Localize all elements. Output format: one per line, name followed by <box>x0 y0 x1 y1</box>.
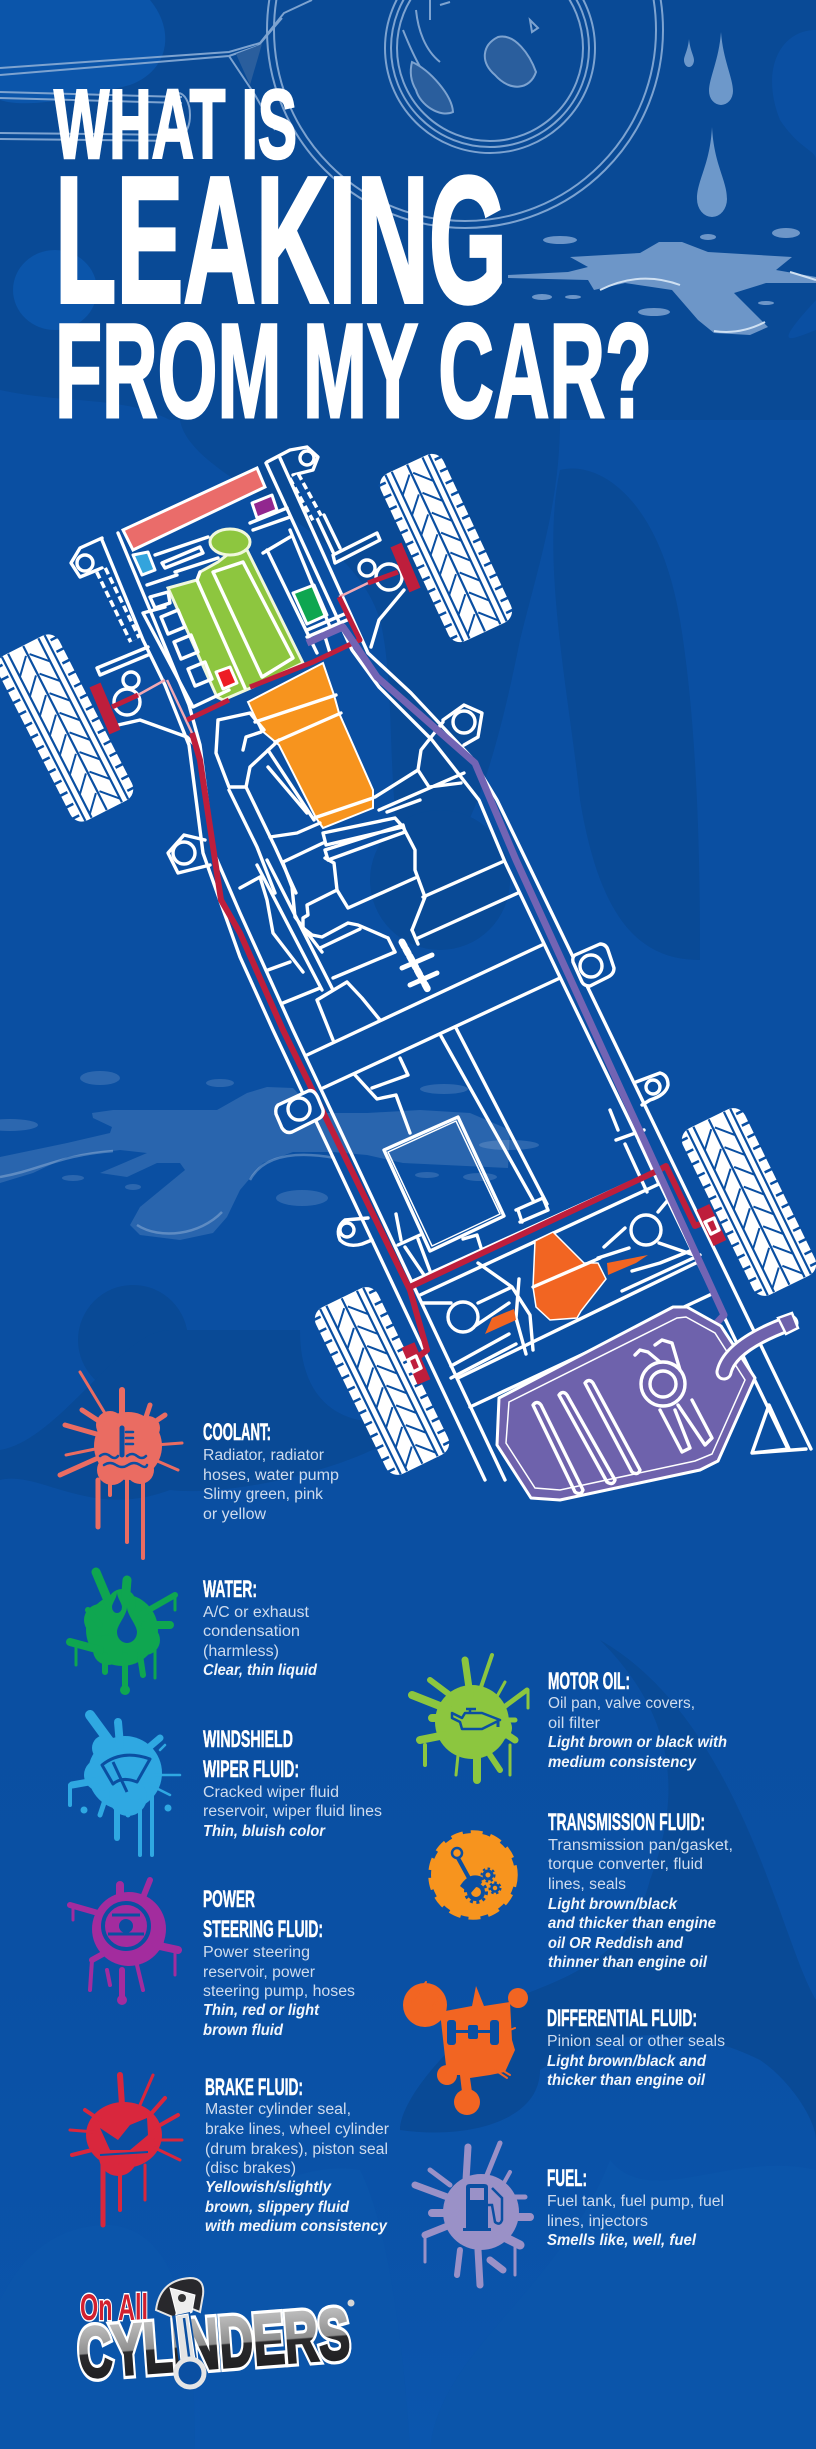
text: motor oil: Light brown or black with <box>548 1734 727 1751</box>
text: power steering: STEERING FLUID: <box>203 1916 323 1943</box>
splat icon: power steering <box>70 1880 178 2005</box>
text: coolant: or yellow <box>203 1506 267 1523</box>
legend: transmission fluid <box>430 1809 733 1971</box>
text: motor oil <box>548 1668 727 1771</box>
legend: motor oil <box>412 1655 727 1780</box>
text: power steering: POWER <box>203 1886 255 1913</box>
logo cylinders word: CYLINDERS <box>75 2294 352 2394</box>
water drops <box>684 32 733 217</box>
title <box>54 69 652 446</box>
legend: fuel <box>415 2143 724 2285</box>
text: transmission fluid: TRANSMISSION FLUID: <box>548 1809 705 1836</box>
text: fuel: FUEL: <box>547 2165 587 2192</box>
text: brake fluid: BRAKE FLUID: <box>205 2074 303 2101</box>
text: brake fluid: (disc brakes) <box>205 2160 296 2177</box>
legend: brake fluid <box>70 2074 389 2235</box>
tire: rear left <box>310 1283 454 1479</box>
text: brake fluid: with medium consistency <box>205 2218 388 2235</box>
component: power steering reservoir <box>252 495 277 518</box>
component: fuel tank <box>497 1307 798 1500</box>
text: wiper fluid: WIPER FLUID: <box>203 1756 299 1783</box>
logo: On All Cylinders <box>75 2278 355 2394</box>
text: wiper fluid: reservoir, wiper fluid lines <box>203 1803 382 1820</box>
logo cylinders word: CYLINDERS <box>75 2294 352 2394</box>
splat icon: transmission <box>430 1832 516 1918</box>
text: fuel: lines, injectors <box>547 2213 648 2230</box>
text: power steering: Thin, red or light <box>203 2002 320 2019</box>
fuel pump icon <box>463 2184 502 2231</box>
text: transmission fluid: oil OR Reddish and <box>548 1935 684 1952</box>
text: coolant: Radiator, radiator <box>203 1447 324 1464</box>
registered mark <box>348 2300 354 2306</box>
text: coolant: Slimy green, pink <box>203 1486 323 1503</box>
wheel hubs on rear brakes <box>408 1218 719 1372</box>
text: fuel: Fuel tank, fuel pump, fuel <box>547 2193 724 2210</box>
frame mounts <box>276 944 668 1245</box>
text: water: (harmless) <box>203 1643 279 1660</box>
text: wiper fluid: WINDSHIELD <box>203 1726 293 1753</box>
middle puddle <box>0 1071 539 1240</box>
text: coolant: hoses, water pump <box>203 1467 339 1484</box>
water drops icon <box>112 1592 137 1643</box>
title: WHAT IS <box>54 69 297 179</box>
text: water: condensation <box>203 1623 300 1640</box>
oil can icon <box>452 1709 500 1729</box>
axle icon <box>447 2020 499 2045</box>
text: differential fluid: thicker than engine oil <box>547 2072 706 2089</box>
text: wiper fluid: Thin, bluish color <box>203 1823 326 1840</box>
text: fuel <box>547 2165 724 2249</box>
legend: coolant <box>60 1372 339 1558</box>
text: coolant: COOLANT: <box>203 1419 271 1446</box>
splat icon: brake fluid <box>70 2075 182 2225</box>
splat icon: water <box>70 1572 175 1695</box>
text: motor oil: MOTOR OIL: <box>548 1668 630 1695</box>
text: brake fluid: brake lines, wheel cylinder <box>205 2121 389 2138</box>
text: transmission fluid: thinner than engine oil <box>548 1954 708 1971</box>
splat icon: fuel <box>415 2143 530 2285</box>
legend: power steering fluid <box>70 1880 355 2039</box>
legend: windshield wiper fluid <box>70 1715 382 1855</box>
text: brake fluid: Master cylinder seal, <box>205 2101 351 2118</box>
brake icon <box>100 2118 148 2155</box>
text: wiper fluid <box>203 1726 382 1840</box>
tire: front left <box>0 630 138 826</box>
text: power steering: Power steering <box>203 1944 310 1961</box>
fuel line <box>307 627 724 1328</box>
logo cylinders word <box>75 2294 352 2394</box>
text: motor oil: oil filter <box>548 1715 600 1732</box>
gear shift icon <box>452 1848 500 1902</box>
logo piston <box>156 2278 204 2387</box>
text: differential fluid: Light brown/black and <box>547 2053 707 2070</box>
text: motor oil: medium consistency <box>548 1754 697 1771</box>
brake lines <box>95 545 720 1382</box>
text: differential fluid: DIFFERENTIAL FLUID: <box>547 2005 697 2032</box>
component: engine <box>168 529 303 700</box>
steering icon <box>103 1903 149 1949</box>
text: differential fluid: Pinion seal or other seals <box>547 2033 725 2050</box>
legend: water <box>70 1572 317 1695</box>
text: power steering: reservoir, power <box>203 1964 315 1981</box>
splat icon: coolant <box>60 1372 182 1558</box>
text: brake fluid: Yellowish/slightly <box>205 2179 332 2196</box>
component: transmission <box>248 663 373 828</box>
text: transmission fluid: and thicker than engine <box>548 1915 716 1932</box>
text: coolant <box>203 1419 339 1523</box>
text: wiper fluid: Cracked wiper fluid <box>203 1784 339 1801</box>
text: motor oil: Oil pan, valve covers, <box>548 1695 695 1712</box>
thermometer icon <box>100 1428 147 1467</box>
text: brake fluid: brown, slippery fluid <box>205 2199 349 2216</box>
component: master cylinder <box>216 667 237 689</box>
legend: differential fluid <box>403 1982 725 2115</box>
text: water: Clear, thin liquid <box>203 1662 317 1679</box>
splat icon: wiper fluid <box>70 1715 180 1855</box>
logo wordmark: On All <box>80 2287 148 2328</box>
text: power steering <box>203 1886 355 2039</box>
wiper icon <box>102 1755 150 1792</box>
splat icon: differential <box>403 1982 528 2115</box>
wheel outline behind title <box>0 0 663 228</box>
text: brake fluid: (drum brakes), piston seal <box>205 2141 388 2158</box>
text: transmission fluid: torque converter, fluid <box>548 1856 703 1873</box>
tires <box>0 450 816 1479</box>
tire: front right <box>376 450 516 646</box>
splat icon: motor oil <box>412 1655 528 1780</box>
text: transmission fluid <box>548 1809 733 1971</box>
text: fuel: Smells like, well, fuel <box>547 2232 697 2249</box>
text: power steering: steering pump, hoses <box>203 1983 355 2000</box>
frame rails and crossmembers <box>71 447 811 1480</box>
text: transmission fluid: Light brown/black <box>548 1896 678 1913</box>
text: water: WATER: <box>203 1576 257 1603</box>
component: radiator <box>123 468 265 550</box>
component: condenser <box>293 585 327 624</box>
text: transmission fluid: lines, seals <box>548 1876 626 1893</box>
top puddle <box>508 228 816 335</box>
component: windshield washer reservoir <box>133 552 155 575</box>
text: water: A/C or exhaust <box>203 1604 310 1621</box>
text: power steering: brown fluid <box>203 2022 284 2039</box>
text: differential fluid <box>547 2005 725 2089</box>
car chassis <box>71 447 811 1500</box>
text: brake fluid <box>205 2074 389 2235</box>
component: differential <box>485 1232 648 1334</box>
text: transmission fluid: Transmission pan/gasket, <box>548 1837 733 1854</box>
suspension ladders <box>101 476 317 640</box>
text: water <box>203 1576 317 1679</box>
tire: rear right <box>677 1104 816 1300</box>
